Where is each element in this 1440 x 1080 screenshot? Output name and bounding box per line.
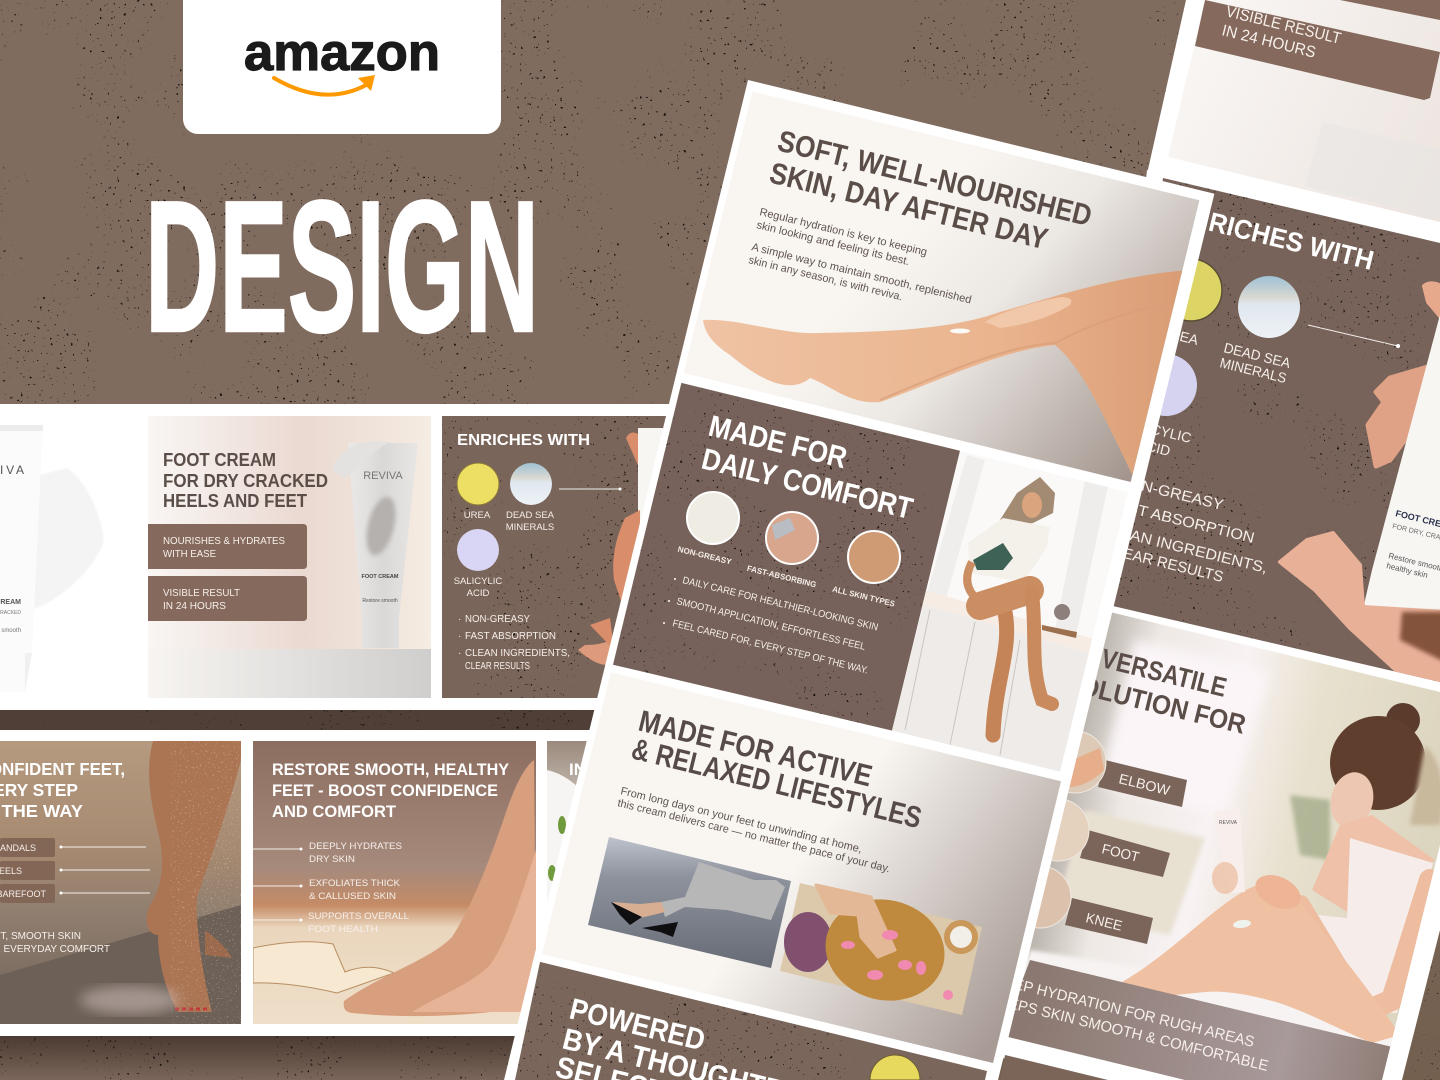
ingredient: urea: [457, 463, 499, 521]
heading: [552, 993, 820, 1080]
connector line: [1308, 325, 1400, 348]
pill: nourishes: WITH EASE: [163, 549, 216, 560]
card: white background: [504, 80, 1214, 1080]
benefits list: CLEAR RESULTS: [465, 661, 530, 672]
panel: enriches with (tilted): [1098, 178, 1440, 696]
benefits list: NON-GREASY: [1116, 472, 1225, 514]
feature: fast-absorbing: FAST-ABSORBING: [746, 564, 817, 589]
logo card: amazon: amazon: [244, 24, 440, 82]
strip text: DEEP HYDRATION FOR RUGH AREAS: [992, 971, 1256, 1051]
tag: elbow: [1068, 732, 1187, 807]
panel: partial third panel: [547, 741, 660, 1024]
card: white gutter: [990, 170, 1440, 1080]
panel: foot cream: [148, 416, 431, 698]
product: foot cream tube: REVIVA: [363, 470, 403, 482]
benefits list: [458, 614, 570, 672]
pill: visible result: IN 24 HOURS: [163, 601, 226, 612]
pill: visible result: [1195, 0, 1440, 100]
ingredient: urea: UREA: [1158, 323, 1201, 348]
photo: legs: [703, 270, 1195, 480]
ingredient: salicylic acid: [1120, 354, 1197, 459]
heading: [272, 764, 509, 817]
pill: nourishes: NOURISHES & HYDRATES: [163, 536, 285, 547]
product: foot cream tube: [332, 441, 418, 648]
feature: all skin types: ALL SKIN TYPES: [831, 585, 896, 609]
heading: POWERED: [566, 993, 708, 1057]
panel: enriches with: [442, 416, 682, 698]
heading: MADE FOR ACTIVE: [635, 705, 875, 793]
heading: & RELAXED LIFESTYLES: [628, 733, 925, 835]
strip text: KEEPS SKIN SMOOTH & COMFORTABLE: [987, 990, 1270, 1075]
ingredient: salicylic acid: ACID: [467, 588, 489, 599]
panel: partial third panel: IN: [569, 760, 586, 779]
heading: FOOT CREAM: [163, 449, 276, 470]
ingredient: urea circle: [870, 1055, 920, 1080]
body text: A simple way to maintain smooth, replenished: [750, 241, 973, 306]
benefits list: ·: [458, 631, 461, 642]
pill: visible result: VISIBLE RESULT: [1224, 3, 1343, 48]
panel: made for active and relaxed lifestyles: [542, 672, 1061, 1063]
body text: this cream delivers care — no matter the pace of your day.: [616, 797, 891, 875]
body text: Regular hydration is key to keeping: [758, 206, 928, 259]
photo: bedroom with woman: REVIVA: [1219, 820, 1238, 826]
panel: confident feet: [0, 741, 241, 1024]
heading: RESTORE SMOOTH, HEALTHY: [272, 760, 510, 779]
panel: versatile solution: SOLUTION FOR: [1061, 667, 1249, 740]
bullet list: SMOOTH APPLICATION, EFFORTLESS FEEL: [675, 596, 867, 653]
heading: AND COMFORT: [272, 802, 397, 821]
heading: DAILY COMFORT: [698, 443, 916, 526]
panel: restore smooth: [253, 741, 536, 1024]
body text: [747, 206, 973, 306]
ingredient: urea: [1158, 259, 1222, 348]
photo: walking leg: [80, 741, 241, 1024]
benefits list: ·: [458, 648, 461, 659]
ingredient: salicylic acid: ACID: [1136, 435, 1172, 459]
logo card: amazon: [183, 0, 501, 134]
product: foot cream tube: Restore smooth: [362, 598, 398, 604]
pill: nourishes: [148, 524, 307, 569]
tag: knee: KNEE: [1084, 909, 1124, 934]
ingredient: salicylic acid: SALICYLIC: [454, 576, 502, 587]
bullet list: DAILY CARE FOR HEALTHIER-LOOKING SKIN: [681, 575, 879, 634]
product: tube with hands: [578, 428, 672, 665]
heading: [0, 763, 124, 817]
benefits list: FAST ABSORPTION: [465, 631, 556, 642]
photo: woman in heels: [588, 837, 791, 968]
product: cream swipe and white tube: smooth: [1, 628, 21, 634]
woman face: [1330, 772, 1374, 825]
column: right tilted card stack: [987, 0, 1440, 1080]
caption: [0, 932, 110, 952]
strip: top row of listing panels: [0, 404, 700, 710]
pill: visible result: VISIBLE RESULT: [163, 588, 240, 599]
feature: fast-absorbing: [746, 512, 818, 589]
heading: FEET - BOOST CONFIDENCE: [272, 781, 498, 800]
product: foot cream tube: FOOT CREAM: [362, 574, 399, 580]
body text: From long days on your feet to unwinding at home,: [619, 785, 863, 856]
heading: SKIN, DAY AFTER DAY: [766, 157, 1051, 256]
column: main tilted card stack: [504, 80, 1214, 1080]
bottom strip: [1008, 960, 1390, 1080]
heading: SOFT, WELL-NOURISHED: [774, 125, 1095, 233]
ingredient: dead sea minerals: DEAD SEA: [506, 510, 555, 521]
ingredient: dead sea minerals: MINERALS: [506, 522, 554, 533]
card: upper visible result panel: [1147, 0, 1440, 250]
panel: made for daily comfort: [613, 383, 1128, 772]
body text: skin looking and feeling its best.: [755, 219, 911, 268]
woman chest and arms: [1312, 815, 1435, 920]
tag: foot: FOOT: [1100, 840, 1141, 865]
product: tube with hands: [1280, 283, 1440, 696]
benefits list: NON-GREASY: [465, 614, 530, 625]
product: cream swipe and white tube: IVA: [0, 463, 24, 477]
callouts: DRY SKIN: [309, 854, 355, 865]
benefits list: ·: [458, 614, 461, 625]
ingredient: urea: UREA: [464, 510, 491, 521]
heading: FOR DRY CRACKED: [163, 470, 328, 491]
product: cream swipe and white tube: REAM: [0, 599, 21, 606]
ingredient: dead sea minerals: [1218, 276, 1300, 386]
panel: versatile solution: [987, 612, 1440, 1080]
feature: all skin types: [831, 531, 900, 609]
photo: woman on bench: [892, 451, 1128, 772]
pill: visible result: [148, 576, 307, 621]
photo: resting feet: [344, 760, 536, 1016]
connector line: [559, 488, 622, 490]
tag: knee: [1009, 866, 1153, 944]
title: DESIGN: DESIGN: [145, 162, 539, 371]
woman hair: [1386, 703, 1420, 732]
feature: non-greasy: NON-GREASY: [677, 545, 733, 567]
bullet list: FEEL CARED FOR, EVERY STEP OF THE WAY.: [671, 618, 869, 677]
tag: elbow: ELBOW: [1117, 770, 1172, 798]
benefits list: CLEAR RESULTS: [1103, 540, 1225, 586]
pills: use cases: [0, 838, 150, 903]
benefits list: FAST ABSORPTION: [1106, 495, 1256, 547]
heading: [163, 449, 328, 511]
ingredient: dead sea minerals: DEAD SEA: [1222, 339, 1293, 371]
panel: versatile solution: VERSATILE: [1098, 643, 1230, 703]
panel: powered by a thoughtful selection: [515, 962, 987, 1080]
photo: open book: [253, 942, 394, 993]
ingredient: salicylic acid: [454, 529, 502, 599]
tube and hand: [1213, 808, 1245, 893]
benefits list: [1098, 472, 1269, 586]
heading: [698, 410, 916, 526]
callouts: & CALLUSED SKIN: [309, 891, 396, 902]
product: cream swipe and white tube: [0, 425, 104, 692]
bullet list: [663, 575, 879, 677]
photo: bedroom with woman: [1000, 640, 1440, 1080]
callouts: DEEPLY HYDRATES: [309, 841, 402, 852]
panel: enriches with: ENRICHES WITH: [457, 432, 590, 449]
panel: enriches with (tilted): ENRICHES WITH: [1171, 198, 1377, 276]
callouts: FOOT HEALTH: [308, 924, 378, 935]
body text: skin in any season, is with reviva.: [747, 254, 904, 303]
benefits list: CLEAN INGREDIENTS,: [1098, 520, 1269, 577]
strip: second row of listing panels: [0, 730, 590, 1036]
photo: foot bath with petals: [780, 883, 982, 1015]
ingredient: salicylic acid: SALICYLIC: [1120, 413, 1193, 446]
product: tube with hands: healthy skin: [1386, 561, 1429, 580]
tag: foot: [1027, 799, 1170, 877]
ingredient: dead sea minerals: [506, 463, 555, 533]
woman legs: [1122, 884, 1400, 1043]
heading: HEELS AND FEET: [163, 490, 308, 511]
feature: non-greasy: [677, 492, 739, 567]
heading: MADE FOR: [705, 410, 850, 475]
ingredient: dead sea minerals: MINERALS: [1218, 354, 1288, 386]
callouts: EXFOLIATES THICK: [309, 878, 401, 889]
panel: bottom edge of next panel: [1000, 1055, 1108, 1080]
callouts: SUPPORTS OVERALL: [308, 911, 409, 922]
callouts: [253, 841, 409, 935]
panel: soft well-nourished: [684, 91, 1199, 482]
benefits list: CLEAN INGREDIENTS,: [465, 648, 570, 659]
pill: visible result: IN 24 HOURS: [1220, 22, 1317, 62]
